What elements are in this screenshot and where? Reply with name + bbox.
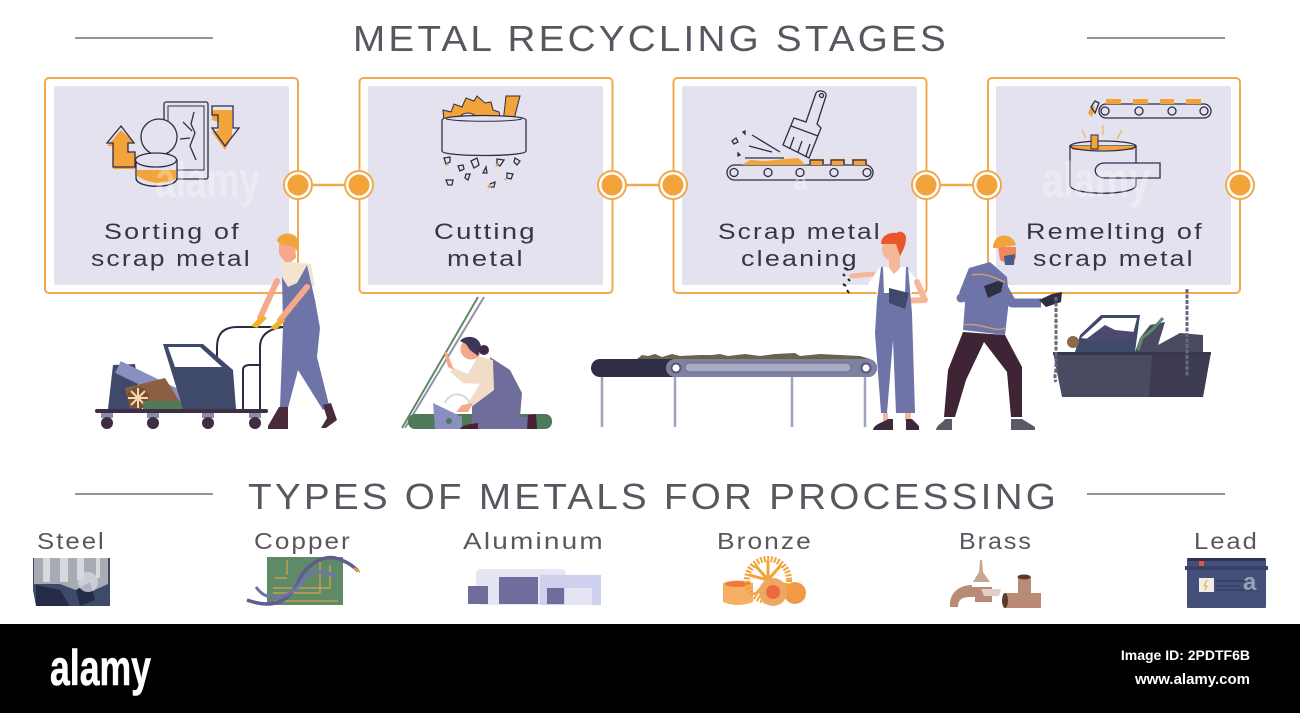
icon: cleaning (727, 91, 873, 180)
item: aluminum: Aluminum (463, 528, 605, 554)
label: scrap metal: Scrap metal (718, 219, 882, 244)
title: METAL RECYCLING STAGES (353, 18, 949, 59)
illustration: worker with chain and bin (936, 236, 1211, 430)
illustration: worker cutting metal rod (402, 297, 552, 429)
label: cutting: Cutting (434, 219, 537, 244)
panel: remelting of scrap metal (988, 78, 1240, 293)
illustration: worker pushing scrap cart (95, 233, 337, 429)
icon: bronze gears (723, 559, 806, 606)
item: brass: Brass (959, 528, 1033, 554)
panel: scrap metal cleaning: a (794, 169, 808, 196)
illustration: worker inspecting scrap (843, 232, 925, 430)
website: www.alamy.com (1134, 671, 1250, 688)
label: sorting of scrap metal: Sorting of (104, 219, 241, 244)
panel: cutting metal (360, 78, 612, 293)
item: lead: Lead (1194, 528, 1259, 554)
item: bronze: Bronze (717, 528, 813, 554)
panel: scrap metal cleaning (674, 78, 926, 293)
panel: sorting of scrap metal: alamy (155, 152, 260, 208)
icon: lead battery: a (1243, 569, 1257, 596)
footer logo: alamy (50, 640, 151, 696)
icon: cutting (442, 96, 526, 188)
item: brass (950, 528, 1041, 608)
item: steel: Steel (37, 528, 106, 554)
label line two: cleaning (741, 246, 859, 271)
panel: remelting of scrap metal: alamy (1042, 152, 1150, 208)
footer bar (0, 624, 1300, 713)
item: copper: Copper (254, 528, 352, 554)
item: aluminum (463, 528, 605, 605)
illustration: conveyor belt with scrap (591, 353, 877, 427)
label line two: scrap metal (91, 246, 252, 271)
icon: copper board and wire (247, 557, 360, 605)
label: remelting of: Remelting of (1026, 219, 1204, 244)
icon: brass faucet and pipe (950, 560, 1041, 608)
item: steel (33, 528, 110, 606)
item: bronze (717, 528, 813, 606)
icon: remelting (1070, 99, 1211, 193)
label line two: metal (447, 246, 525, 271)
label line two: scrap metal (1033, 246, 1195, 271)
item: lead (1185, 528, 1268, 608)
timeline connectors (284, 171, 1254, 199)
subtitle: TYPES OF METALS FOR PROCESSING (248, 476, 1059, 517)
panel: sorting of scrap metal (45, 78, 298, 293)
item: copper (247, 528, 360, 605)
icon: steel scrap (33, 558, 110, 606)
image id: Image ID: 2PDTF6B (1121, 647, 1250, 663)
icon: sorting (107, 102, 239, 186)
icon: aluminum blocks (468, 569, 601, 605)
